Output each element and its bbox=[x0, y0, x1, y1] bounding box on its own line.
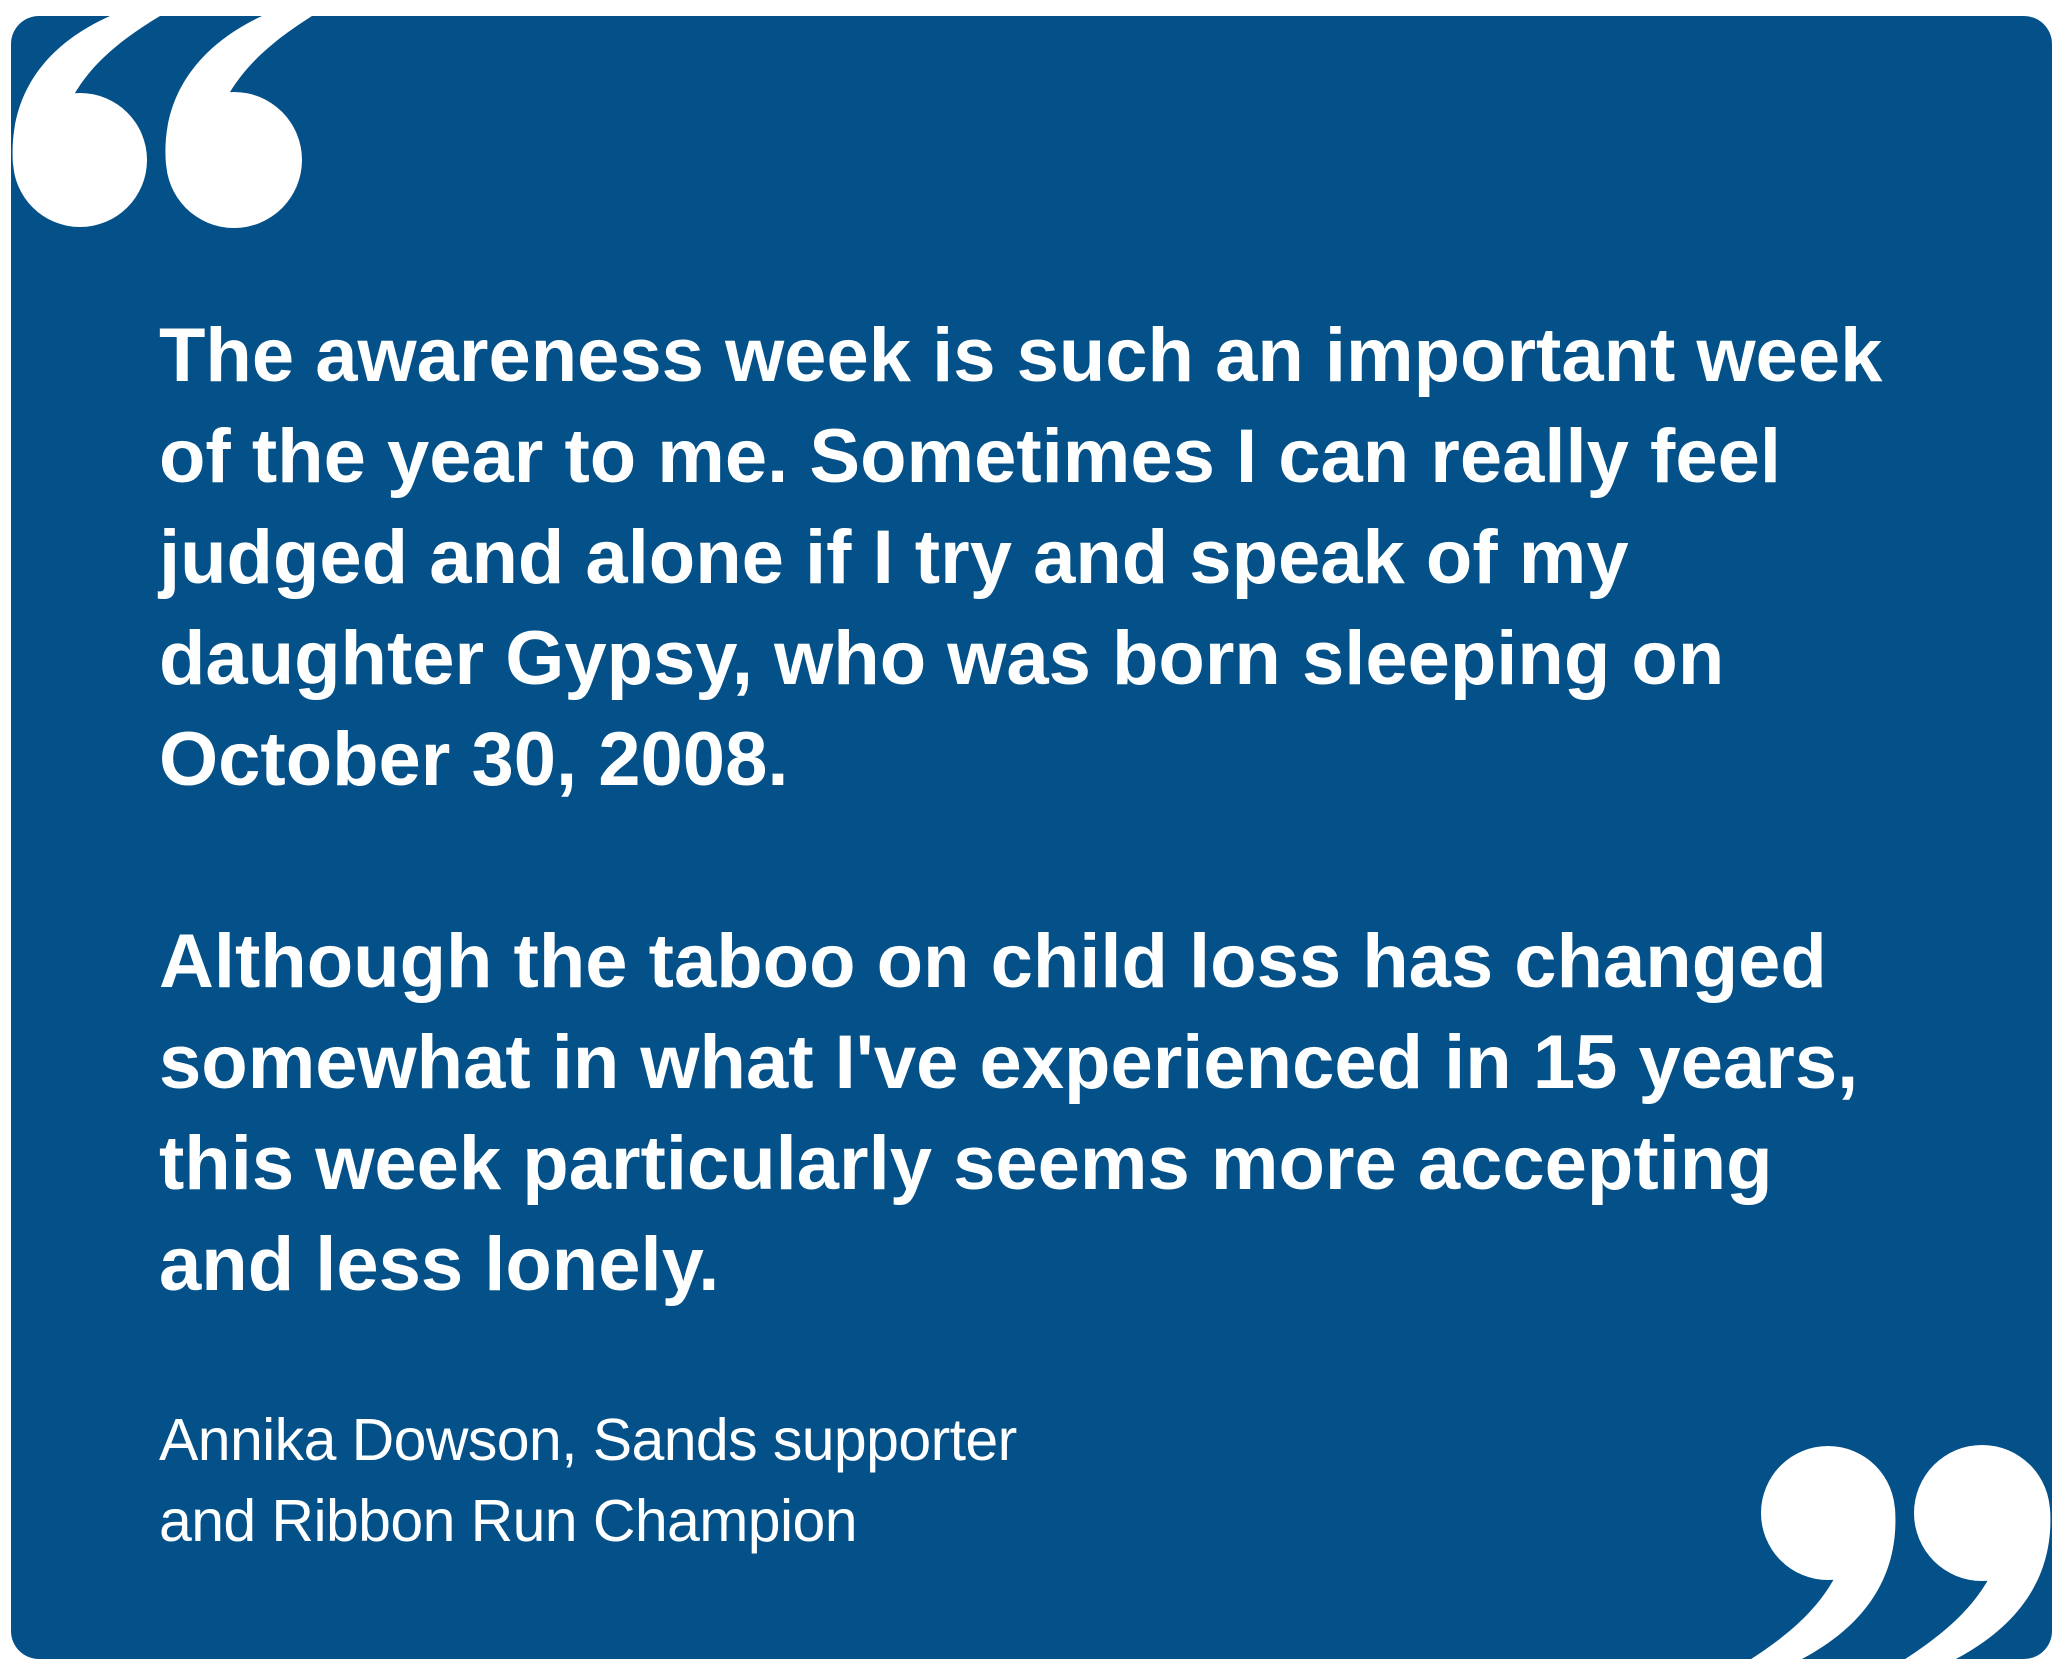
text block: quote bbox=[158, 313, 1882, 1307]
text block: quote: and less lonely. bbox=[159, 1222, 719, 1307]
text block: attribution: and Ribbon Run Champion bbox=[159, 1488, 857, 1554]
icon: closing quote marks bbox=[1748, 1445, 2050, 1661]
text block: attribution bbox=[159, 1407, 1017, 1554]
text block: quote: October 30, 2008. bbox=[159, 717, 788, 802]
text block: attribution: Annika Dowson, Sands supporter bbox=[159, 1407, 1017, 1473]
text block: quote: daughter Gypsy, who was born sleeping on bbox=[159, 616, 1724, 701]
text block: quote: of the year to me. Sometimes I can really feel bbox=[159, 414, 1781, 499]
text block: quote: Although the taboo on child loss has changed bbox=[159, 919, 1827, 1004]
text block: quote: somewhat in what I've experienced in 15 years, bbox=[159, 1020, 1858, 1105]
text block: quote: this week particularly seems more accepting bbox=[159, 1121, 1773, 1206]
text block: quote: judged and alone if I try and speak of my bbox=[159, 515, 1629, 600]
text block: quote: The awareness week is such an important week bbox=[159, 313, 1882, 398]
